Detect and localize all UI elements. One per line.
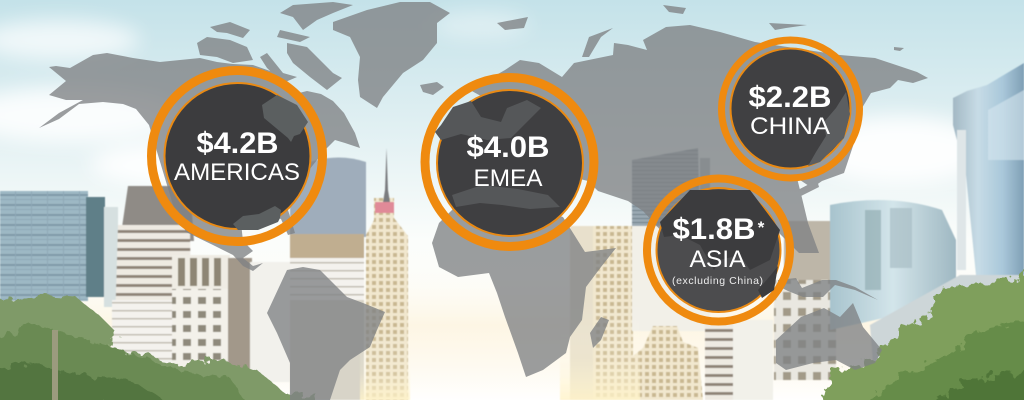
map: small arctic island east (894, 47, 904, 51)
map: Madagascar (590, 317, 609, 348)
map: Australia (776, 303, 882, 370)
Asia asterisk: * (758, 218, 765, 237)
map: Victoria island (197, 37, 253, 63)
Asia land shapes (660, 190, 780, 298)
EMEA value: $4.0B (466, 131, 550, 164)
map: Svalbard (497, 17, 528, 30)
building: office block (172, 255, 230, 289)
map: Franz Josef Land (663, 5, 686, 14)
callout: Americas (152, 70, 322, 242)
Asia note: (excluding China) (672, 275, 763, 287)
Americas disc (164, 83, 310, 229)
map: Somerset island (260, 53, 297, 83)
Asia value: $1.8B (672, 213, 756, 246)
EMEA label: EMEA (474, 165, 542, 192)
building: left glass block (0, 191, 88, 301)
building: grey tower (632, 148, 700, 228)
building: glass tower (290, 158, 366, 237)
building: spire tower (366, 198, 408, 400)
map: Severnaya Zemlya (769, 23, 807, 30)
Gulf patch (233, 206, 281, 230)
Americas label: AMERICAS (174, 159, 300, 186)
Europe sea patches (435, 100, 560, 209)
building: tan left (570, 226, 593, 400)
China value: $2.2B (748, 81, 832, 114)
callout: Asia (647, 178, 790, 322)
callout: China (722, 40, 860, 178)
map: Devon island (277, 30, 310, 42)
map: Eurasia and Arabia (470, 25, 928, 291)
China disc (730, 48, 850, 168)
map: North America (39, 53, 360, 271)
EMEA outer ring (425, 78, 594, 246)
building: rounded glass (830, 200, 956, 330)
map: Africa (432, 193, 616, 377)
map: Ellesmere island (280, 2, 353, 30)
Asia label: ASIA (690, 246, 746, 273)
map: Baffin island (287, 43, 342, 90)
Americas value: $4.2B (196, 127, 278, 160)
EMEA disc (437, 90, 583, 236)
building: palace (628, 326, 703, 400)
background: trees (0, 272, 1024, 400)
China label: CHINA (750, 113, 830, 140)
map: small arctic island (210, 22, 250, 38)
map: Japan (794, 180, 819, 197)
Hudson bay patch (262, 95, 308, 142)
building: striped tower (120, 186, 194, 241)
building: office right (784, 221, 834, 281)
palm trunk (52, 330, 58, 400)
Asia disc (656, 188, 780, 312)
map: Novaya Zemlya (582, 28, 613, 57)
map: Iceland (420, 82, 444, 95)
China outer ring (722, 40, 860, 178)
building: low white (870, 275, 1024, 375)
map: New Guinea and Indonesia (778, 278, 878, 300)
building: right glass tower (953, 63, 1024, 275)
map: Greenland (333, 2, 450, 108)
callout: EMEA (425, 78, 594, 246)
map: South America (267, 267, 385, 400)
Yellow sea patch (808, 92, 850, 166)
Asia outer ring (647, 178, 790, 322)
Americas outer ring (152, 70, 322, 242)
